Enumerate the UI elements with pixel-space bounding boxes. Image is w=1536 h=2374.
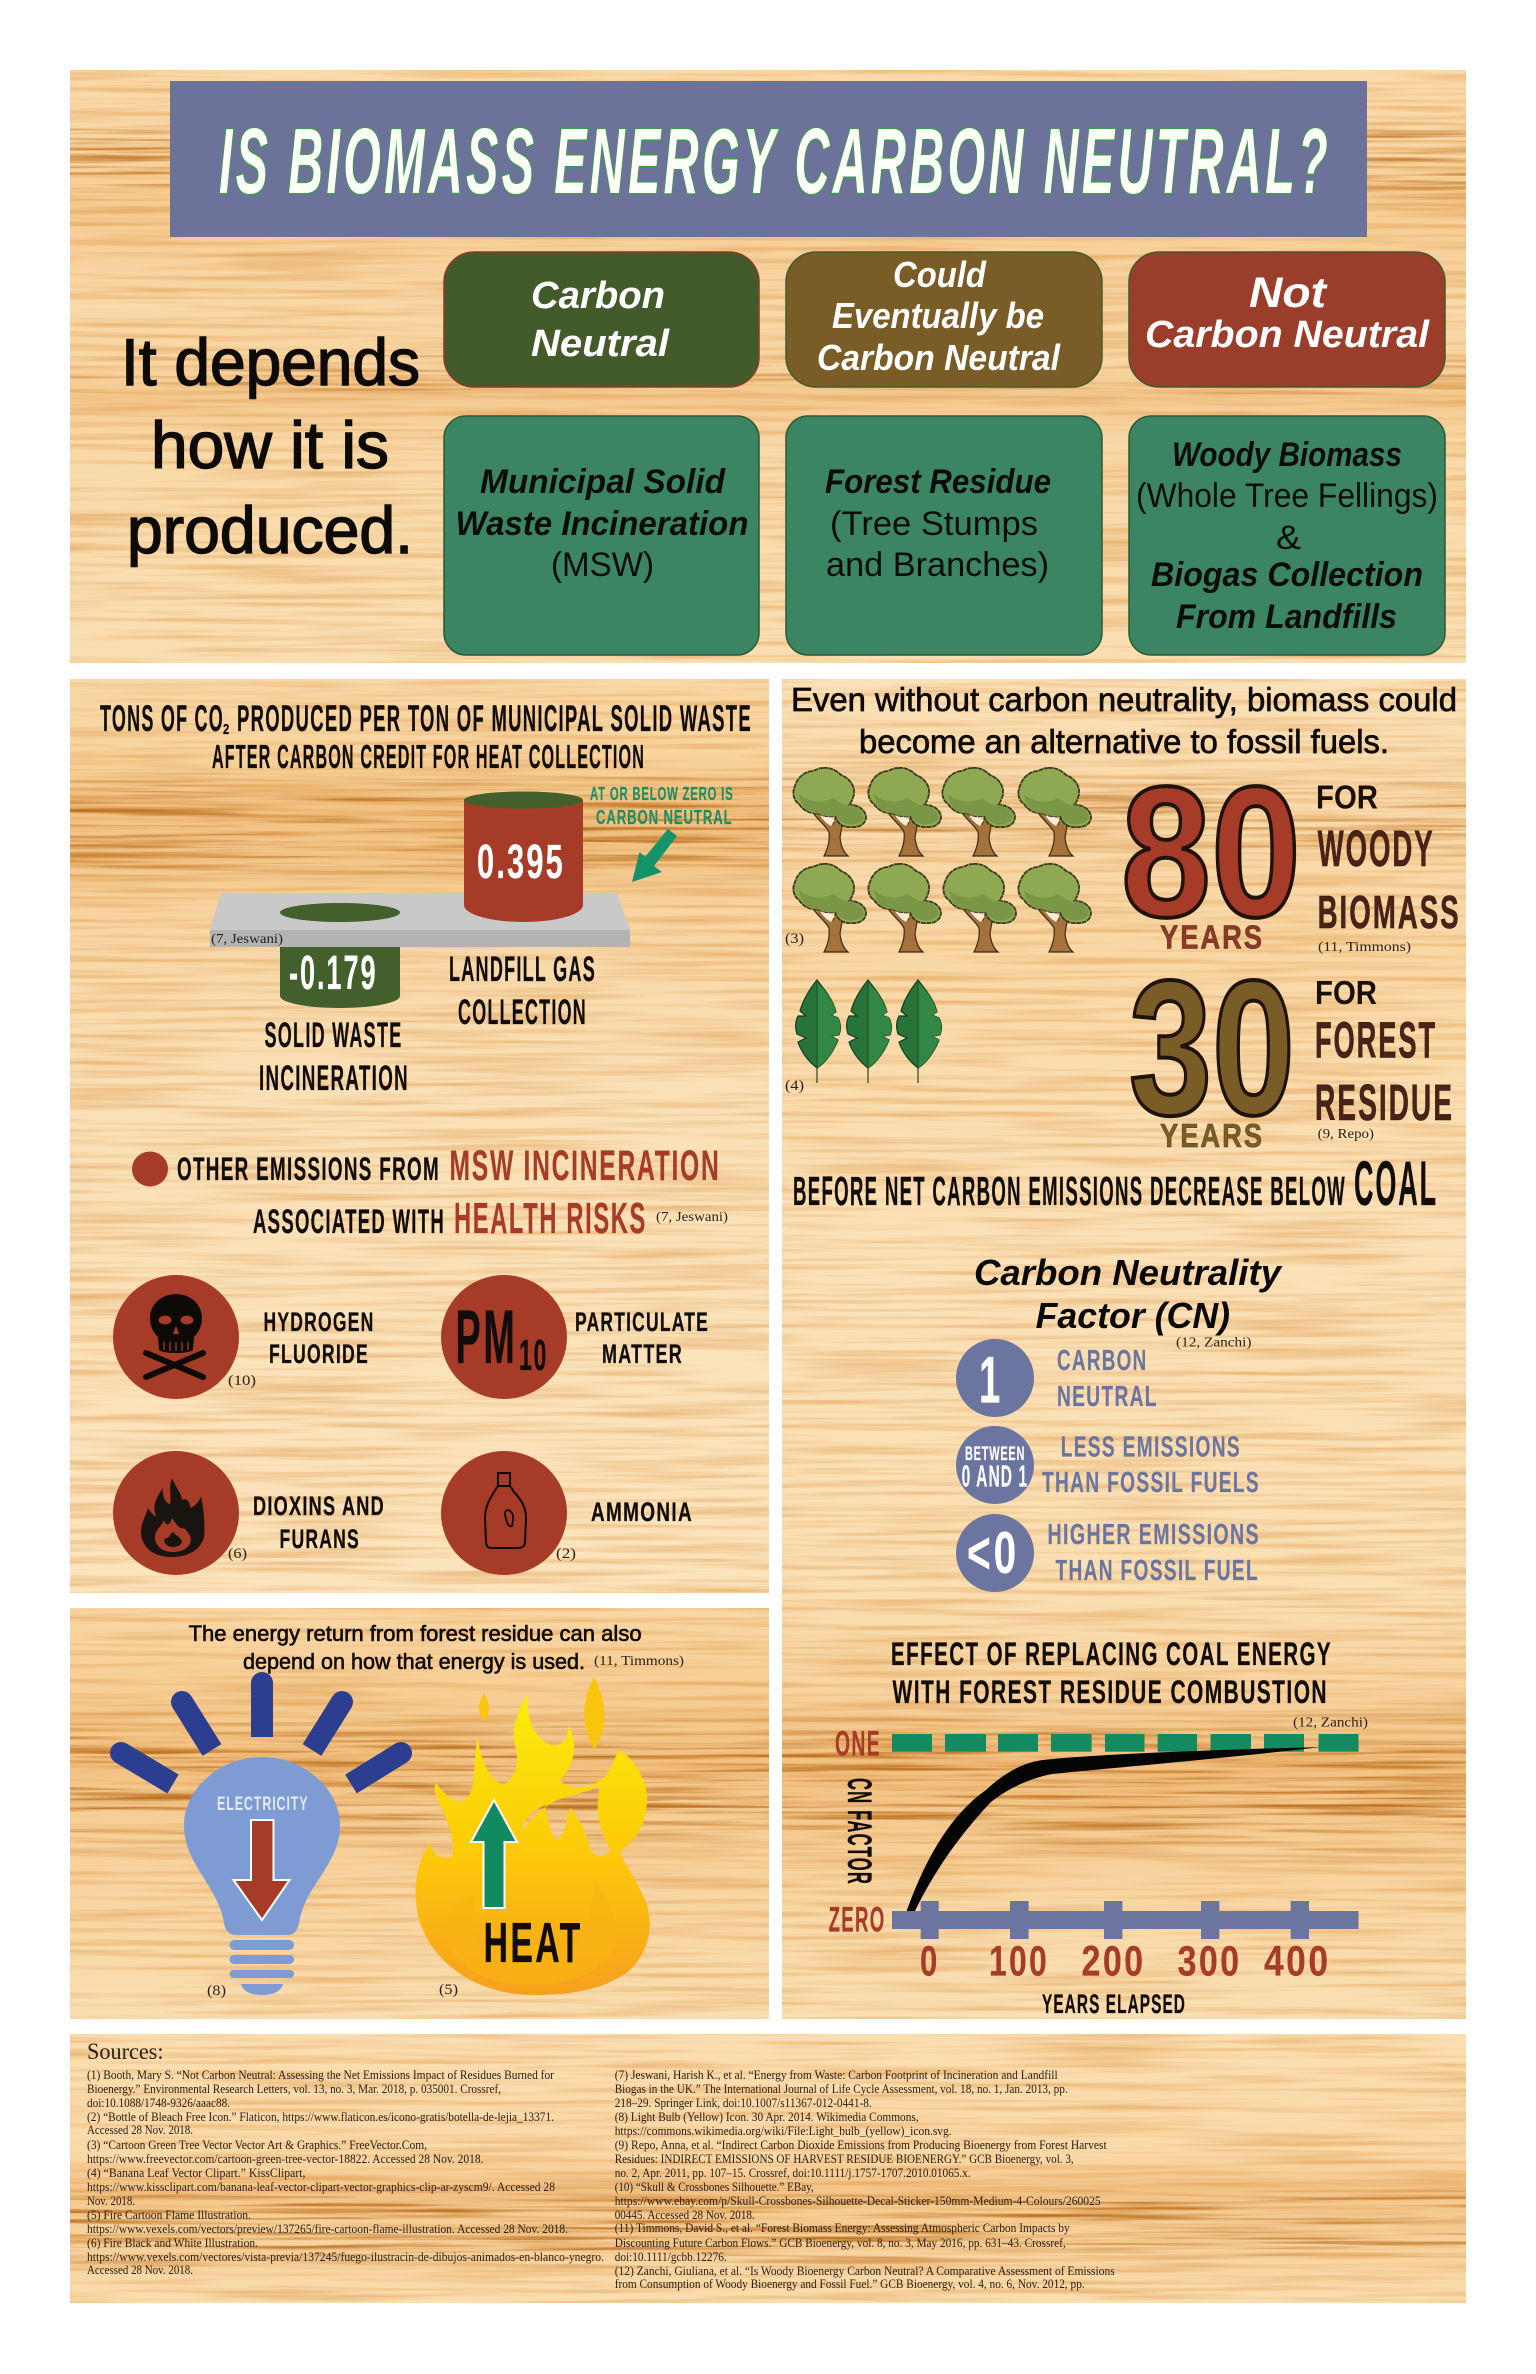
stat: 80 years for woody biomass: (11, Timmons) <box>1318 940 1411 955</box>
hazard: dioxins and furans: FURANS <box>280 1524 360 1554</box>
callout: at or below zero: CARBON NEUTRAL <box>596 807 732 829</box>
stat: 80 years for woody biomass: FOR <box>1316 779 1378 816</box>
line chart: CN factor over years: 100 <box>989 1938 1049 1986</box>
statement: alternative to fossil fuels: become an alternative to fossil fuels. <box>859 723 1389 760</box>
line chart: CN factor over years: ZERO <box>829 1901 886 1940</box>
icon: flame with heat arrow <box>416 1677 650 1998</box>
icon: three leaves <box>785 980 941 1094</box>
sources heading: Sources: <box>87 2039 164 2064</box>
icon: three leaves: (4) <box>785 1078 804 1094</box>
CN legend: between 0 and 1: LESS EMISSIONS <box>1061 1432 1241 1464</box>
sources list: right column: (8) Light Bulb (Yellow) Icon. 30 Apr. 2014. Wikimedia Commons, <box>615 2110 919 2124</box>
sources list: left column: (3) “Cartoon Green Tree Vector Vector Art & Graphics.” FreeVector.Com, <box>87 2138 427 2152</box>
heading: carbon neutrality factor: Carbon Neutrality <box>974 1252 1283 1293</box>
stat: 30 years for forest residue: YEARS <box>1160 1117 1264 1154</box>
cylinder chart: (7, Jeswani) <box>211 932 283 947</box>
line chart: CN factor over years: 200 <box>1082 1938 1146 1986</box>
chart heading: TONS OF CO <box>100 698 224 739</box>
icon: eight trees <box>785 768 1091 952</box>
heading: other emissions <box>132 1142 728 1243</box>
sources list: right column: no. 2, Apr. 2011, pp. 107–15. Crossref, doi:10.1111/j.1757-1707.2010.01065.x. <box>615 2166 971 2180</box>
CN legend: less than zero: THAN FOSSIL FUEL <box>1056 1555 1259 1587</box>
sources list: right column: doi:10.1111/gcbb.12276. <box>615 2250 727 2264</box>
sources list: right column: (7) Jeswani, Harish K., et al. “Energy from Waste: Carbon Footprint of Incineration and Landfill <box>615 2068 1058 2082</box>
CN legend: 1 carbon neutral: CARBON <box>1057 1345 1148 1377</box>
example: municipal solid waste incineration: Waste Incineration <box>456 505 748 543</box>
icon: flame with heat arrow: HEAT <box>484 1911 583 1975</box>
line chart: CN factor over years: 400 <box>1264 1938 1330 1986</box>
cylinder chart <box>210 792 630 1008</box>
CN legend: less than zero: <0 <box>967 1520 1019 1586</box>
panel statement: depend on how that energy is used. <box>243 1649 585 1674</box>
icon: eight trees: (3) <box>785 931 804 947</box>
hazard: hydrogen fluoride: HYDROGEN <box>264 1307 374 1337</box>
example: forest residue <box>786 416 1102 655</box>
chart heading: effect of replacing coal <box>891 1636 1332 1710</box>
heading: other emissions: OTHER EMISSIONS FROM <box>177 1151 440 1187</box>
hazard: dioxins and furans <box>113 1451 385 1575</box>
lead statement: it depends: produced. <box>127 493 413 567</box>
panel: CO2 per ton of municipal solid waste <box>70 679 769 1593</box>
statement: before net emissions decrease below coal <box>793 1149 1438 1219</box>
sources list: left column: (5) Fire Cartoon Flame Illustration. <box>87 2208 251 2222</box>
hazard: hydrogen fluoride: FLUORIDE <box>269 1339 369 1369</box>
chart heading: AFTER CARBON CREDIT FOR HEAT COLLECTION <box>212 738 645 775</box>
citation: (11, Timmons) <box>594 1654 684 1669</box>
sources list: left column: https://www.kissclipart.com/banana-leaf-vector-clipart-vector-graphics-clip-ar-zyscm9/. Accessed 28 <box>87 2180 555 2194</box>
bar label: solid waste incineration <box>259 1016 409 1098</box>
bar label: solid waste incineration: INCINERATION <box>259 1059 409 1098</box>
CN legend: between 0 and 1: THAN FOSSIL FUELS <box>1042 1467 1260 1499</box>
sources list: right column: (11) Timmons, David S., et al. “Forest Biomass Energy: Assessing Atmospheric Carbon Impacts by <box>615 2221 1070 2235</box>
sources list: right column: (10) “Skull & Crossbones Silhouette.” EBay, <box>615 2180 814 2194</box>
example: woody biomass and biogas: Biogas Collection <box>1151 556 1423 594</box>
sources list: left column: Nov. 2018. <box>87 2194 135 2208</box>
sources list: left column: https://www.vexels.com/vectors/preview/137265/fire-cartoon-flame-illustration. Accessed 28 Nov. 2018. <box>87 2222 568 2236</box>
line chart: CN factor over years: 300 <box>1178 1938 1242 1986</box>
panel: sources <box>70 2034 1466 2303</box>
example: woody biomass and biogas: From Landfills <box>1176 598 1397 636</box>
stat: 80 years for woody biomass: YEARS <box>1160 919 1264 956</box>
CN legend: between 0 and 1 <box>956 1426 1260 1504</box>
panel: CO2 per ton of municipal solid waste: PRODUCED PER TON OF MUNICIPAL SOLID WASTE <box>237 698 752 739</box>
heading: carbon neutrality factor: Factor (CN) <box>1036 1295 1230 1336</box>
panel: title and three categories <box>70 70 1466 663</box>
stat: 80 years for woody biomass: 80 <box>1121 749 1301 956</box>
heading: other emissions: ASSOCIATED WITH <box>253 1203 445 1241</box>
sources list: right column: from Consumption of Woody Bioenergy and Fossil Fuel.” GCB Bioenergy, vol. 4, no. 6, Nov. 2012, pp. <box>615 2277 1085 2291</box>
panel: biomass versus fossil fuels and CN factor <box>782 679 1466 2019</box>
stat: 30 years for forest residue <box>1129 940 1454 1155</box>
hazard: ammonia: (2) <box>556 1546 576 1562</box>
bar label: landfill gas collection: COLLECTION <box>458 993 587 1032</box>
sources list: left column: (4) “Banana Leaf Vector Clipart.” KissClipart, <box>87 2166 306 2180</box>
statement: alternative to fossil fuels <box>791 681 1457 760</box>
sources list: right column: (9) Repo, Anna, et al. “Indirect Carbon Dioxide Emissions from Producing Bioenergy from Forest Harvest <box>615 2138 1107 2152</box>
sources list: left column <box>87 2068 604 2277</box>
example: forest residue: Forest Residue <box>825 463 1051 501</box>
panel: energy return electricity vs heat <box>70 1608 769 2019</box>
CN legend: between 0 and 1: 0 AND 1 <box>962 1459 1028 1494</box>
stat: 30 years for forest residue: 30 <box>1129 940 1295 1155</box>
bar label: landfill gas collection <box>449 950 596 1032</box>
category: carbon neutral: Carbon <box>531 275 665 317</box>
sources list: left column: https://www.freevector.com/cartoon-green-tree-vector-18822. Accessed 28 Nov. 2018. <box>87 2152 484 2166</box>
example: woody biomass and biogas: & <box>1276 519 1301 557</box>
hazard: particulate matter PM10 <box>441 1275 709 1399</box>
stat: 30 years for forest residue: (9, Repo) <box>1318 1127 1374 1142</box>
cylinder chart: -0.179 <box>289 947 378 1000</box>
icon: light bulb with electricity arrow <box>110 1672 412 1999</box>
sources list: right column: (12) Zanchi, Giuliana, et al. “Is Woody Bioenergy Carbon Neutral? A Comparative Assessment of Emissions <box>615 2264 1115 2278</box>
hazard: particulate matter PM10: PM <box>456 1295 518 1380</box>
arrow: green pointing at slab <box>632 829 677 882</box>
example: municipal solid waste incineration <box>444 416 759 655</box>
CN legend: 1 carbon neutral: 1 <box>979 1343 1003 1417</box>
sources list: right column: Discounting Future Carbon Flows.” GCB Bioenergy, vol. 8, no. 3, May 2016, pp. 631–43. Crossref, <box>615 2236 1066 2250</box>
category: not carbon neutral: Carbon Neutral <box>1145 314 1430 356</box>
sources list: right column: Residues: INDIRECT EMISSIONS OF HARVEST RESIDUE BIOENERGY.” GCB Bioenergy, vol. 3, <box>615 2152 1074 2166</box>
icon: light bulb with electricity arrow: (8) <box>207 1983 226 1999</box>
heading: carbon neutrality factor: (12, Zanchi) <box>1176 1336 1252 1351</box>
sources list: left column: Accessed 28 Nov. 2018. <box>87 2123 193 2137</box>
example: woody biomass and biogas: Woody Biomass <box>1172 436 1402 474</box>
line chart: CN factor over years: CN FACTOR <box>840 1778 878 1885</box>
sources list: left column: (2) “Bottle of Bleach Free Icon.” Flaticon, https://www.flaticon.es/icono-gratis/botella-de-lejia_13371. <box>87 2110 554 2124</box>
icon: light bulb with electricity arrow: ELECTRICITY <box>217 1794 308 1815</box>
CN legend: less than zero: HIGHER EMISSIONS <box>1048 1519 1260 1551</box>
category: could eventually be carbon neutral: Could <box>893 254 987 295</box>
sources list: right column: Biogas in the UK.” The International Journal of Life Cycle Assessment, vol. 18, no. 1, Jan. 2013, pp. <box>615 2082 1068 2096</box>
cylinder chart: 0.395 <box>477 836 565 889</box>
example: forest residue: (Tree Stumps <box>830 505 1038 543</box>
line chart: CN factor over years: ONE <box>835 1725 881 1764</box>
lead statement: it depends: It depends <box>121 325 420 399</box>
sources list: left column: Accessed 28 Nov. 2018. <box>87 2263 193 2277</box>
sources list: right column: 218–29. Springer Link, doi:10.1007/s11367-012-0441-8. <box>615 2096 872 2110</box>
bar label: landfill gas collection: LANDFILL GAS <box>449 950 596 989</box>
hazard: dioxins and furans: (6) <box>228 1546 247 1562</box>
hazard: particulate matter PM10: 10 <box>519 1331 548 1380</box>
sources list: right column <box>615 2068 1115 2291</box>
line chart: CN factor over years: YEARS ELAPSED <box>1042 1989 1186 2019</box>
lead statement: it depends: how it is <box>151 408 389 482</box>
category: not carbon neutral <box>1129 252 1445 387</box>
example: forest residue: and Branches) <box>826 546 1049 584</box>
stat: 80 years for woody biomass: WOODY <box>1318 820 1435 877</box>
chart heading <box>100 698 752 775</box>
title banner <box>170 81 1367 237</box>
callout: at or below zero: AT OR BELOW ZERO IS <box>590 784 734 804</box>
heading: other emissions: HEALTH RISKS <box>454 1194 647 1243</box>
example: municipal solid waste incineration: (MSW) <box>551 546 654 584</box>
CN legend: between 0 and 1: BETWEEN <box>965 1444 1025 1465</box>
panel statement: The energy return from forest residue can also <box>189 1621 642 1646</box>
CN legend: 1 carbon neutral: NEUTRAL <box>1057 1381 1158 1413</box>
example: municipal solid waste incineration: Municipal Solid <box>480 463 726 501</box>
sources list: right column: https://www.ebay.com/p/Skull-Crossbones-Silhouette-Decal-Sticker-150mm-Medium-4-Colours/260025 <box>615 2194 1101 2208</box>
sources list: left column: https://www.vexels.com/vectores/vista-previa/137245/fuego-ilustracin-de-dibujos-animados-en-blanco-ynegro. <box>87 2250 604 2264</box>
sources list: left column: Bioenergy.” Environmental Research Letters, vol. 13, no. 3, Mar. 2018, p. 035001. Crossref, <box>87 2082 501 2096</box>
hazard: hydrogen fluoride <box>113 1275 374 1399</box>
category: carbon neutral: Neutral <box>531 323 671 365</box>
hazard: ammonia: AMMONIA <box>591 1497 693 1527</box>
heading: other emissions: (7, Jeswani) <box>656 1210 728 1225</box>
bar label: solid waste incineration: SOLID WASTE <box>264 1016 402 1055</box>
CN legend: 1 carbon neutral <box>956 1339 1158 1417</box>
line chart: CN factor over years <box>829 1716 1368 2019</box>
lead statement: it depends <box>121 325 420 567</box>
example: woody biomass and biogas <box>1129 416 1445 655</box>
example: woody biomass and biogas: (Whole Tree Fellings) <box>1136 477 1438 515</box>
hazard: hydrogen fluoride: (10) <box>228 1373 256 1389</box>
line chart: CN factor over years: 0 <box>920 1938 940 1986</box>
hazard: ammonia <box>441 1451 693 1575</box>
icon: flame with heat arrow: (5) <box>439 1982 458 1998</box>
callout: at or below zero <box>590 784 734 829</box>
heading: carbon neutrality factor <box>974 1252 1283 1351</box>
sources list: right column: 00445. Accessed 28 Nov. 2018. <box>615 2208 755 2222</box>
category: carbon neutral <box>444 252 759 387</box>
statement: alternative to fossil fuels: Even without carbon neutrality, biomass could <box>791 681 1457 718</box>
category: could eventually be carbon neutral: Eventually be <box>832 295 1044 336</box>
stat: 80 years for woody biomass <box>1121 749 1461 956</box>
sources list: left column: doi:10.1088/1748-9326/aaac88. <box>87 2096 230 2110</box>
hazard: dioxins and furans: DIOXINS AND <box>253 1491 385 1521</box>
sources list: left column: (6) Fire Black and White Illustration. <box>87 2236 258 2250</box>
hazard: particulate matter PM10: MATTER <box>602 1339 683 1369</box>
category: could eventually be carbon neutral: Carbon Neutral <box>817 337 1061 378</box>
category: could eventually be carbon neutral <box>786 252 1102 387</box>
heading: other emissions: MSW INCINERATION <box>450 1142 720 1190</box>
category: not carbon neutral: Not <box>1249 269 1328 317</box>
chart heading: 2 <box>223 721 230 738</box>
panel statement <box>189 1621 642 1674</box>
CN legend: less than zero <box>956 1514 1260 1592</box>
line chart: CN factor over years: (12, Zanchi) <box>1293 1716 1368 1731</box>
stat: 30 years for forest residue: FOR <box>1315 974 1377 1011</box>
sources list: left column: (1) Booth, Mary S. “Not Carbon Neutral: Assessing the Net Emissions Impact of Residues Burned for <box>87 2068 555 2082</box>
hazard: particulate matter PM10: PARTICULATE <box>575 1307 709 1337</box>
sources list: right column: https://commons.wikimedia.org/wiki/File:Light_bulb_(yellow)_icon.svg. <box>615 2124 952 2138</box>
